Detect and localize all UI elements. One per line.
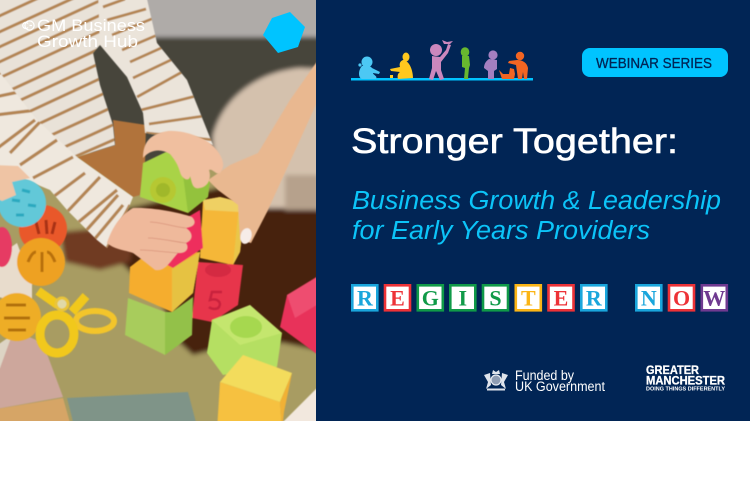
block R: R <box>586 286 603 310</box>
photo: child's hands <box>107 131 223 270</box>
block R <box>581 285 606 310</box>
photo: adult arm and hand <box>208 62 316 245</box>
wooden bar <box>282 388 316 421</box>
photo: room background <box>0 0 316 421</box>
block O <box>669 285 694 310</box>
photo: toy balls and left hand <box>0 165 67 341</box>
pink stacked block <box>167 210 204 268</box>
silhouette: child playing with blocks <box>390 52 413 79</box>
funded by text: Funded by <box>515 368 574 383</box>
photo: rug colour patches <box>0 337 196 421</box>
Greater text: GREATER <box>646 365 700 377</box>
block G: G <box>422 286 439 310</box>
UK Government text: UK Government <box>515 379 605 394</box>
Manchester text: MANCHESTER <box>646 376 726 388</box>
block I <box>450 285 475 310</box>
icon: silhouettes of children at different ages <box>351 40 533 80</box>
photo: striped shirt <box>0 0 214 250</box>
right pink block <box>280 278 316 354</box>
block T <box>516 285 541 310</box>
silhouette: older child bending <box>484 50 498 79</box>
photo: yellow toy clips <box>38 291 114 353</box>
top green block <box>140 150 210 213</box>
block S <box>483 285 508 310</box>
subtitle line 1: Business Growth & Leadership <box>352 187 721 215</box>
orange stacked block <box>129 252 200 312</box>
logo: GM Business Growth Hub <box>23 17 145 51</box>
bottom yellow block <box>217 382 282 421</box>
silhouette: child with dog <box>499 52 528 79</box>
block N <box>636 285 661 310</box>
block G <box>418 285 443 310</box>
block E <box>548 285 574 310</box>
subtitle line 2: for Early Years Providers <box>352 217 650 245</box>
panel: navy content panel <box>316 0 750 421</box>
light green block <box>207 305 282 375</box>
block I: I <box>459 286 467 310</box>
panel: photo of child stacking toy blocks <box>0 0 316 421</box>
green stacked block <box>125 298 165 355</box>
block E: E <box>390 286 405 310</box>
block E: E <box>554 286 568 310</box>
logo icon: GM mark <box>23 21 34 30</box>
badge: webinar series: WEBINAR SERIES <box>596 56 712 72</box>
register now letter blocks <box>352 285 727 310</box>
block E <box>385 285 410 310</box>
red number block <box>192 262 243 322</box>
icon: royal crest <box>484 370 508 390</box>
photo: trousers <box>77 120 146 197</box>
block O: O <box>673 286 690 310</box>
block T: T <box>521 286 536 310</box>
logo: Greater Manchester <box>646 365 726 392</box>
block S: S <box>489 286 502 310</box>
silhouette: toddler standing <box>461 47 470 79</box>
upper yellow block <box>200 197 245 265</box>
block W: W <box>703 286 725 310</box>
strapline: DOING THINGS DIFFERENTLY <box>646 386 725 392</box>
ground line <box>351 78 533 80</box>
logo text: GM Business: GM Business <box>37 17 145 35</box>
photo: toy block stack <box>125 150 325 430</box>
silhouette: sitting baby <box>358 56 380 79</box>
icon: cyan hexagon <box>263 12 305 53</box>
block N: N <box>641 286 657 310</box>
logo: funded by UK Government <box>484 368 605 394</box>
block R <box>352 285 377 310</box>
silhouette: child with toy plane <box>429 40 453 80</box>
title: Stronger Together: <box>351 122 678 161</box>
logo text: Growth Hub: Growth Hub <box>37 33 138 51</box>
block R: R <box>357 286 374 310</box>
badge: webinar series <box>582 48 728 77</box>
subtitle <box>352 187 721 245</box>
